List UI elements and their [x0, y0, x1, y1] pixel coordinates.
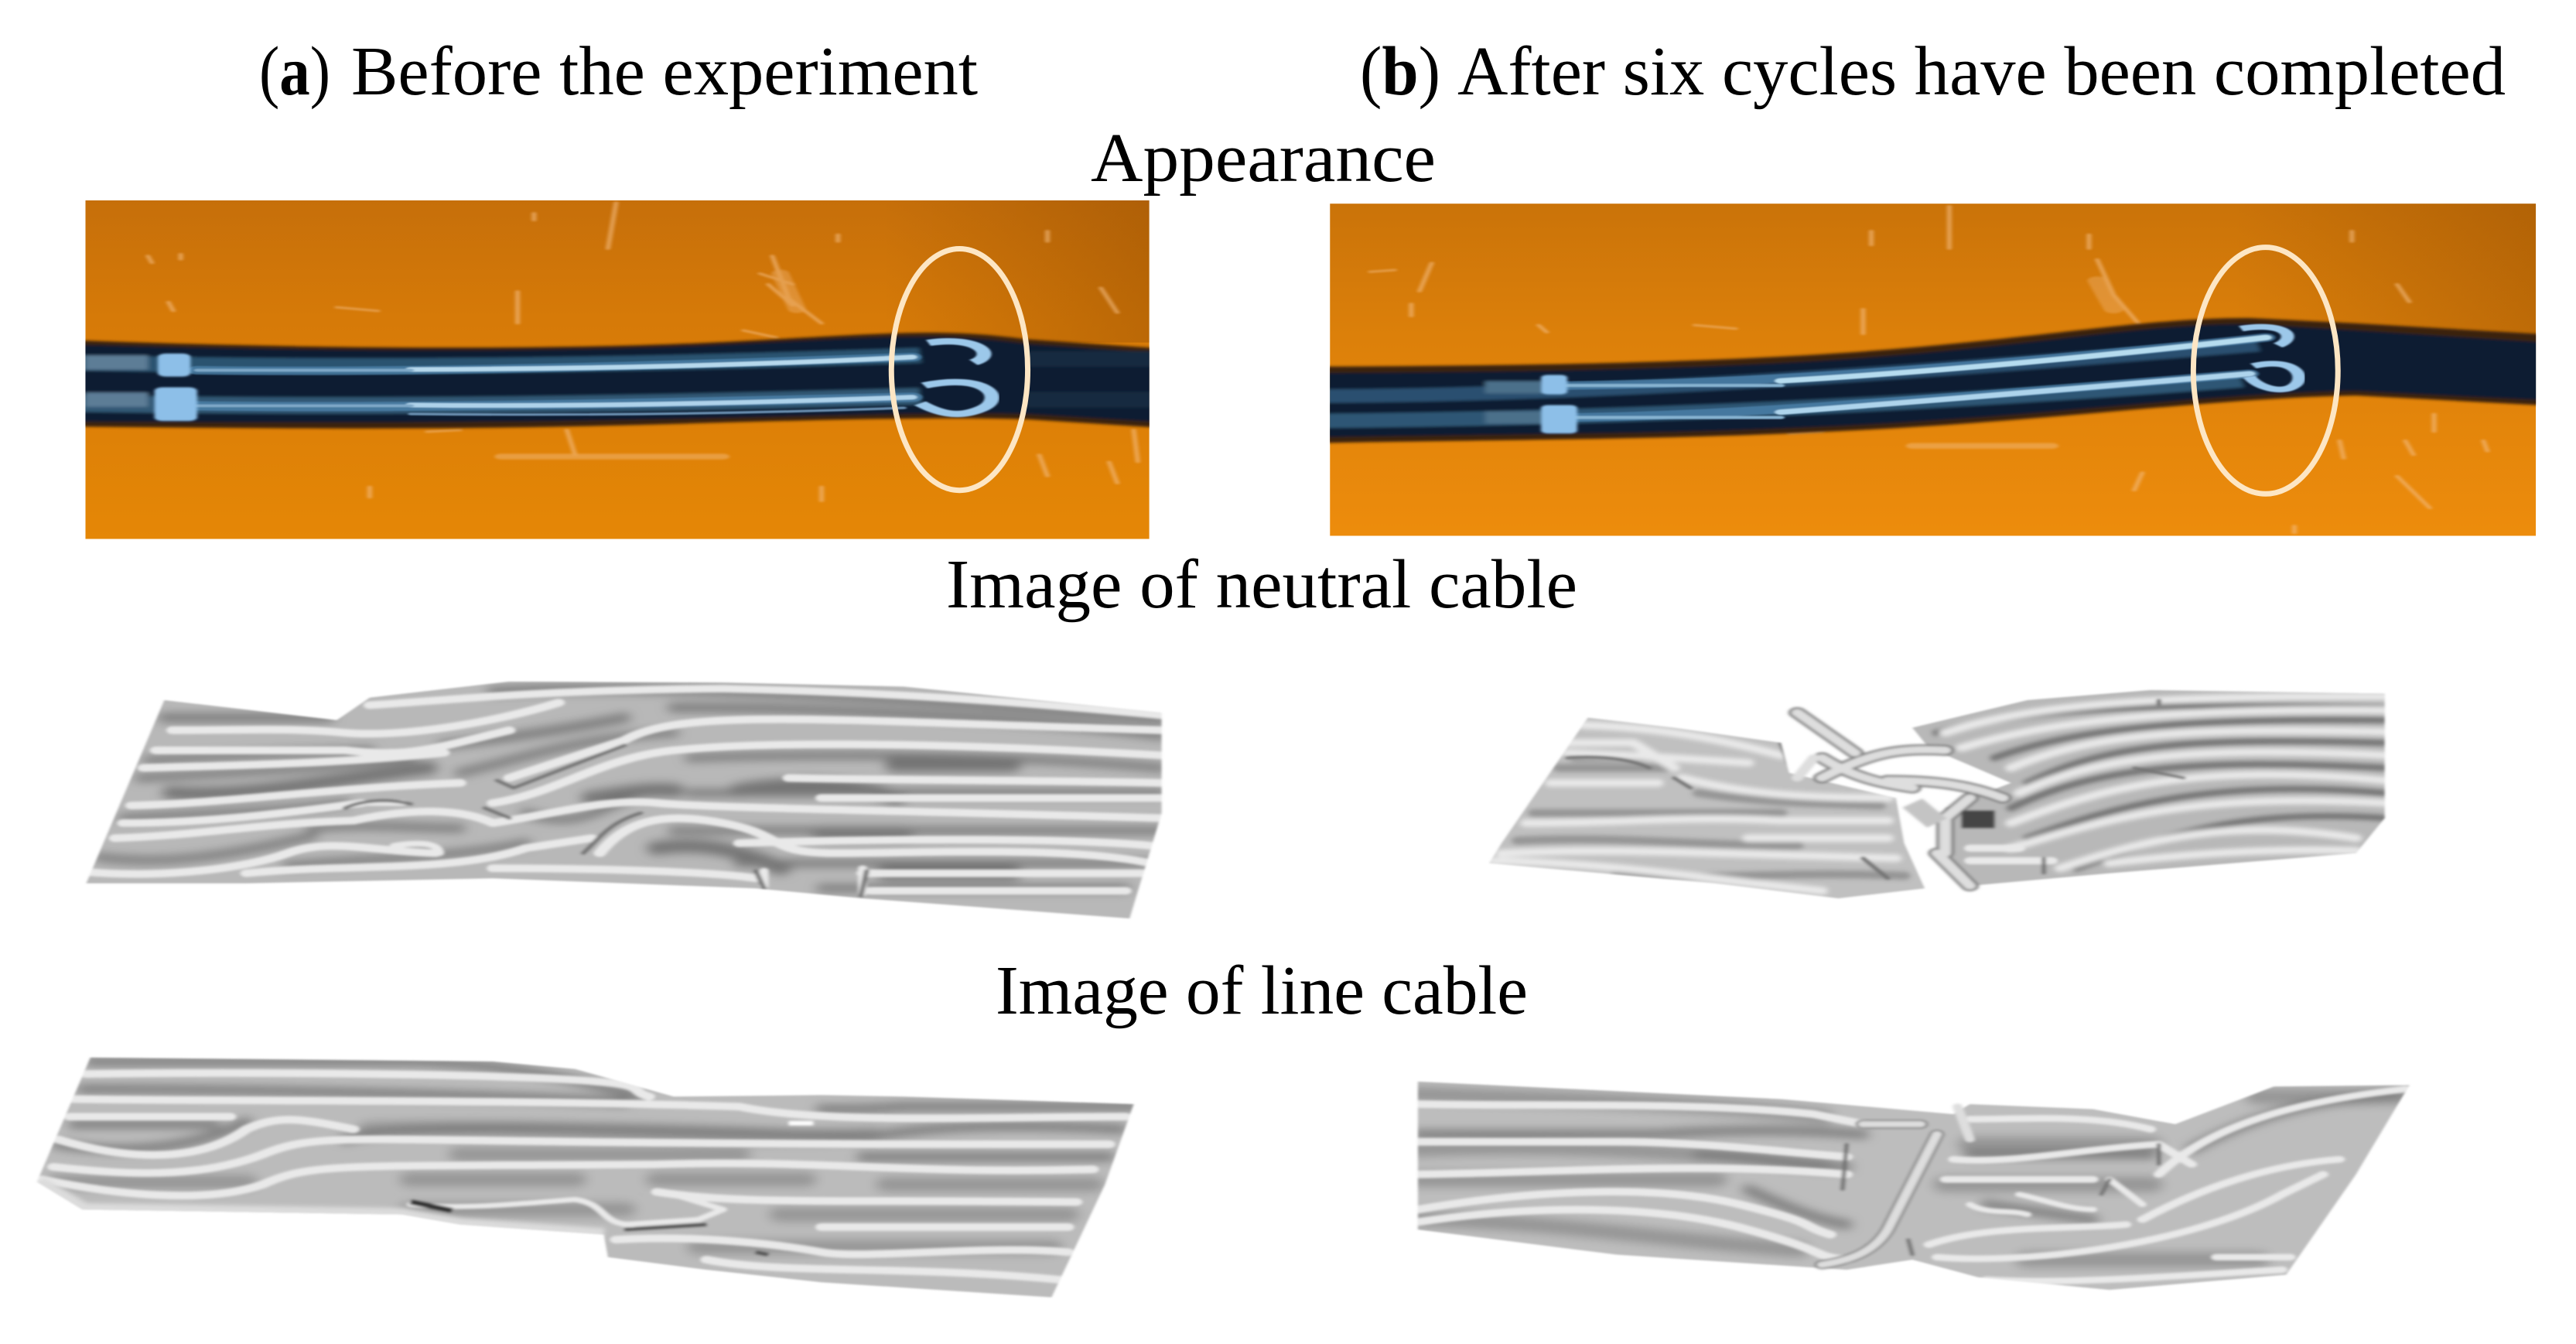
heading: (b) After six cycles have been completed: After six cycles have been completed	[1457, 33, 2506, 110]
image: neutral cable strands after six cycles	[1485, 688, 2397, 904]
heading: (b) After six cycles have been completed: (b)	[1360, 33, 1440, 110]
row heading: Image of line cable: Image of line cable	[996, 952, 1528, 1029]
twisted broken wires at centre	[1797, 713, 2003, 886]
image: neutral cable strands before experiment	[74, 678, 1175, 923]
broken wire crossing at centre	[1822, 1106, 1970, 1265]
heading: (a) Before the experiment: Before the experiment	[351, 33, 978, 110]
photo: cable appearance before experiment	[50, 200, 1183, 539]
image: line cable strands before experiment	[25, 1054, 1150, 1305]
row heading: Appearance: Appearance	[1091, 120, 1436, 197]
row heading: Image of neutral cable: Image of neutral cable	[946, 546, 1577, 623]
image: line cable strands after six cycles	[1411, 1079, 2422, 1294]
photo: cable appearance after six cycles	[1297, 203, 2570, 535]
heading: (a) Before the experiment: (a)	[259, 33, 330, 110]
